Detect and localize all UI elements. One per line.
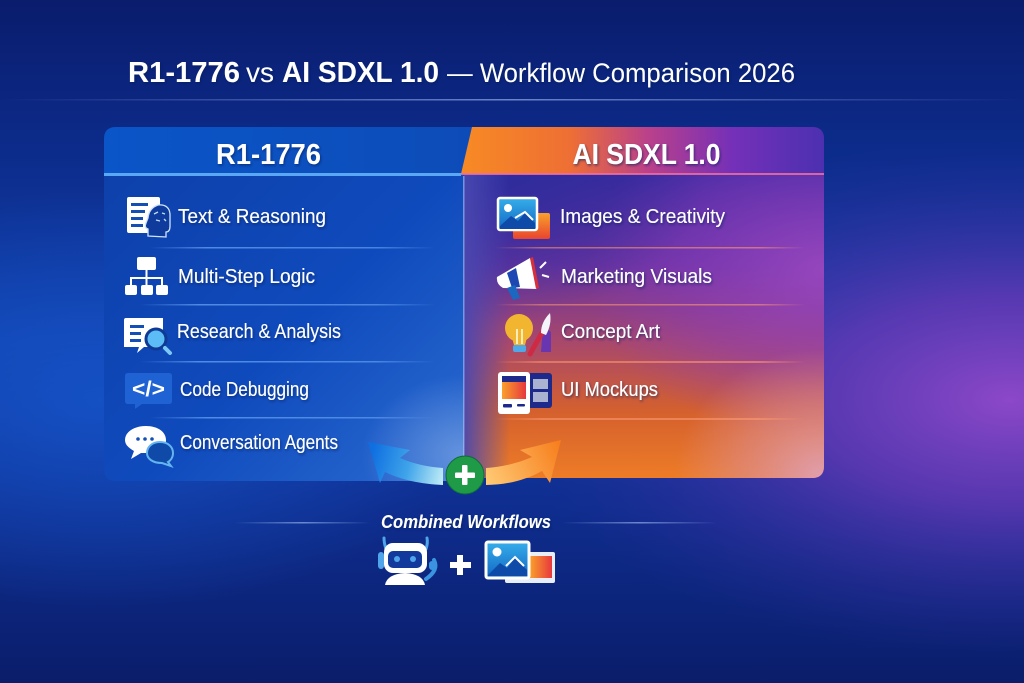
- panel: R1-1776 body: [104, 127, 464, 481]
- icon: research: [124, 318, 170, 353]
- left list labels: [177, 206, 341, 454]
- title: — Workflow Comparison 2026: [447, 58, 795, 88]
- arrow: combine to left: [368, 442, 443, 485]
- icon: robot: [378, 538, 435, 585]
- icon: plus sign: [450, 555, 471, 575]
- icon: text and reasoning: [127, 197, 170, 237]
- left list labels: Code Debugging: [180, 379, 309, 401]
- heading: R1-1776: R1-1776: [216, 139, 321, 171]
- right list labels: Concept Art: [561, 321, 660, 343]
- icon: UI mockups: [498, 372, 552, 414]
- icon: image cards: [486, 542, 555, 583]
- heading: AI SDXL 1.0: AI SDXL 1.0: [572, 139, 720, 171]
- icon: images: [498, 198, 550, 239]
- header: R1-1776 band: [104, 127, 472, 175]
- title: vs: [246, 57, 274, 88]
- comparison panel: [104, 127, 824, 481]
- title: AI SDXL 1.0: [282, 57, 439, 89]
- arrow: combine to right: [486, 440, 561, 485]
- left list labels: Research & Analysis: [177, 321, 341, 343]
- left list labels: Text & Reasoning: [178, 206, 326, 228]
- panel: AI SDXL 1.0 body: [464, 127, 824, 478]
- right list labels: UI Mockups: [561, 379, 658, 401]
- title: [128, 57, 795, 89]
- right list labels: [560, 206, 725, 401]
- title: R1-1776: [128, 57, 240, 89]
- combined workflows label: Combined Workflows: [381, 512, 551, 532]
- icon: megaphone: [497, 257, 549, 300]
- right list labels: Images & Creativity: [560, 206, 725, 228]
- header: AI SDXL 1.0 band: [461, 127, 824, 174]
- icon: chat bubbles: [125, 426, 173, 466]
- icon: lightbulb and brush: [505, 313, 551, 354]
- icon: hierarchy: [125, 257, 168, 295]
- left list labels: Multi-Step Logic: [178, 266, 315, 288]
- left list labels: Conversation Agents: [180, 432, 338, 454]
- icon: green plus: [446, 456, 484, 494]
- icon: code: </>: [132, 378, 165, 401]
- row dividers: [140, 247, 805, 420]
- right list labels: Marketing Visuals: [561, 266, 712, 288]
- icon: code: [125, 373, 172, 409]
